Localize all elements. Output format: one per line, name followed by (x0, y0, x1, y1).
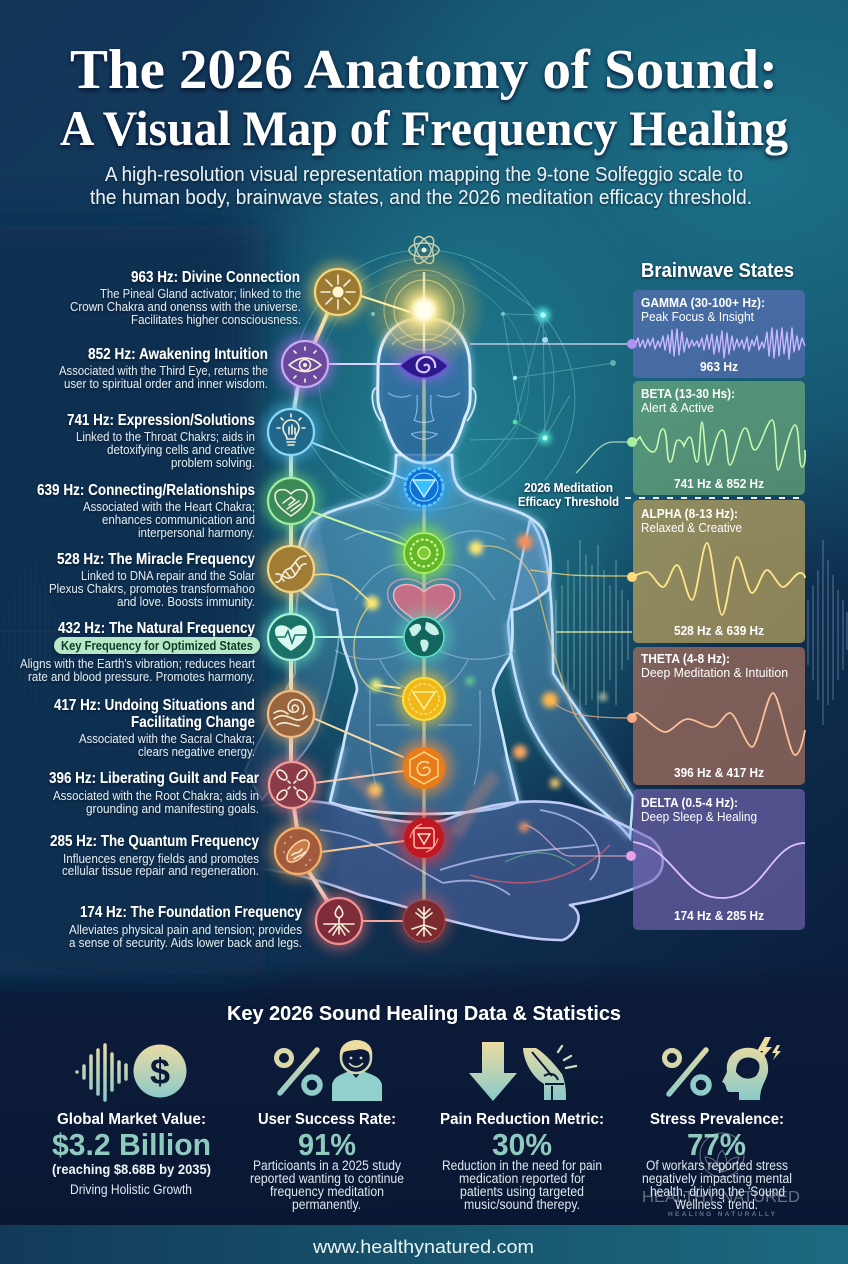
stat: user success rate (250, 1040, 404, 1212)
watermark: HEALING NATURALLY (668, 1211, 776, 1218)
text: 396 Hz: grounding and manifesting goals. (86, 802, 259, 816)
watermark (642, 1133, 800, 1218)
sound bars decoration (0, 540, 847, 725)
chakra: tree of life (397, 894, 451, 948)
text: 285 Hz (50, 833, 259, 878)
ears (372, 388, 476, 421)
network nodes (371, 308, 616, 444)
text: 639 Hz (37, 482, 255, 540)
dark shade behind left text (0, 225, 265, 975)
chakra: root (397, 811, 451, 865)
node: 396 Hz broken chains (263, 756, 321, 814)
chakra: sacral (396, 740, 452, 796)
panel: beta (627, 381, 805, 495)
connector: gamma (470, 343, 632, 345)
panel: alpha (627, 500, 805, 643)
text: 528 Hz (49, 551, 255, 609)
heading: key statistics: Key 2026 Sound Healing Data & Statistics (227, 1002, 621, 1025)
pelvic glow (352, 775, 496, 835)
chakra: heart green (396, 525, 452, 581)
subtitle (90, 164, 752, 209)
footer bar (0, 1225, 848, 1264)
heading: brainwave states: Brainwave States (641, 260, 794, 282)
central energy column (422, 350, 426, 920)
icon: down arrow and knee (469, 1042, 576, 1101)
text: 417 Hz (54, 697, 255, 759)
pill: key frequency: Key Frequency for Optimized States (61, 638, 253, 653)
panel: beta: Alert & Active (641, 401, 714, 415)
head glow top (392, 334, 456, 345)
text: 432 Hz: Aligns with the Earth's vibration; reduces heart (20, 657, 255, 671)
stat: user success rate: Particioants in a 2025 study (253, 1158, 401, 1173)
stat: global market value: Global Market Value: (57, 1111, 206, 1128)
crown glow (362, 248, 486, 372)
stat: global market value: $3.2 Billion (52, 1127, 211, 1162)
stat: global market value: Driving Holistic Growth (70, 1182, 192, 1197)
panel: delta: 174 Hz & 285 Hz (674, 909, 764, 923)
stat: pain reduction metric: Reduction in the need for pain (442, 1158, 602, 1173)
text: 852 Hz (59, 346, 268, 391)
text: 741 Hz: 741 Hz: Expression/Solutions (67, 412, 255, 429)
text: 396 Hz (49, 770, 259, 816)
stat: pain reduction metric: Pain Reduction Metric: (440, 1111, 604, 1128)
chest and abdomen contours (335, 531, 515, 785)
stat: stress prevalence: Wellness' trend. (675, 1197, 758, 1212)
panel: alpha: 528 Hz & 639 Hz (674, 624, 764, 638)
text: 528 Hz: 528 Hz: The Miracle Frequency (57, 551, 255, 568)
panel: gamma: Peak Focus & Insight (641, 310, 754, 324)
panel: theta: THETA (4-8 Hz): (641, 652, 730, 666)
stat: pain reduction metric: patients using targeted (460, 1184, 584, 1199)
left arm (245, 520, 340, 800)
stat: pain reduction metric (440, 1042, 604, 1212)
panel: beta: BETA (13-30 Hs): (641, 387, 735, 401)
text: 528 Hz: Linked to DNA repair and the Solar (81, 569, 255, 583)
stat: stress prevalence: Stress Prevalence: (650, 1111, 784, 1128)
right arm (508, 520, 633, 838)
text: 852 Hz: Associated with the Third Eye, returns the (59, 364, 268, 378)
watermark: HEALTHY NATURED (642, 1189, 800, 1206)
chakra: throat (397, 460, 451, 514)
label: meditation efficacy threshold (518, 481, 619, 509)
text: 852 Hz: 852 Hz: Awakening Intuition (88, 346, 268, 363)
panel: gamma: GAMMA (30-100+ Hz): (641, 296, 765, 310)
text: 432 Hz (20, 620, 260, 684)
body rim glow (299, 318, 633, 838)
title: The 2026 Anatomy of Sound: (70, 39, 778, 101)
node: 741 Hz light bulb (262, 403, 320, 461)
text: 432 Hz: rate and blood pressure. Promotes harmony. (28, 670, 255, 684)
icon: sound wave and dollar (77, 1044, 186, 1100)
text: 174 Hz: Alleviates physical pain and tension; provides (69, 923, 302, 937)
stat: global market value (52, 1044, 211, 1197)
stat: stress prevalence: negatively impacting mental (642, 1171, 792, 1186)
icon: percent and person (276, 1040, 382, 1101)
stat: user success rate: frequency meditation (270, 1184, 384, 1199)
text: 396 Hz: Associated with the Root Chakra; aids in (53, 789, 259, 803)
panel: delta: Deep Sleep & Healing (641, 810, 757, 824)
icon: sound wave and dollar: $ (150, 1051, 170, 1092)
node: 285 Hz cell (269, 822, 327, 880)
node: 417 Hz water swirl (262, 685, 320, 743)
stat: stress prevalence: Of workars reported stress (646, 1158, 788, 1173)
text: 174 Hz (69, 904, 302, 950)
text: 963 Hz: Facilitates higher consciousness. (131, 313, 301, 327)
text: 285 Hz: cellular tissue repair and regeneration. (62, 864, 259, 878)
chakra: third eye (398, 352, 450, 380)
text: 417 Hz: clears negative energy. (138, 745, 255, 759)
text: 639 Hz: 639 Hz: Connecting/Relationships (37, 482, 255, 499)
chakra: earth globe (397, 610, 451, 664)
panel: beta: 741 Hz & 852 Hz (674, 477, 764, 491)
network lines behind head (294, 250, 613, 510)
icon: percent and stressed head (664, 1037, 781, 1100)
text: 174 Hz: a sense of security. Aids lower back and legs. (69, 936, 302, 950)
text: 741 Hz (67, 412, 255, 470)
panel: delta: DELTA (0.5-4 Hz): (641, 796, 738, 810)
panel: theta (627, 647, 805, 785)
text: 174 Hz: 174 Hz: The Foundation Frequency (80, 904, 302, 921)
chakra: solar plexus (396, 671, 452, 727)
frequency chain connectors (291, 292, 410, 921)
node: 963 Hz sun (309, 263, 367, 321)
node: 852 Hz eye (276, 335, 334, 393)
panel: alpha: Relaxed & Creative (641, 521, 742, 535)
text: 741 Hz: Linked to the Throat Chakrs; aids in (76, 430, 255, 444)
stat: stress prevalence: 77% (687, 1127, 746, 1162)
text: 417 Hz: Associated with the Sacral Chakra; (79, 732, 255, 746)
glowing joints (365, 596, 379, 610)
panel: delta (626, 789, 805, 930)
stat: pain reduction metric: 30% (492, 1127, 552, 1162)
panel: gamma: 963 Hz (700, 360, 738, 374)
head and neck (378, 318, 470, 463)
text: 963 Hz: Crown Chakra and onenss with the universe. (70, 300, 301, 314)
text: 963 Hz: 963 Hz: Divine Connection (131, 269, 300, 286)
stat: stress prevalence (642, 1037, 792, 1212)
subtitle: A high-resolution visual representation mapping the 9-tone Solfeggio scale to (105, 164, 743, 186)
subtitle: the human body, brainwave states, and the 2026 meditation efficacy threshold. (90, 187, 752, 209)
footer bar: www.healthynatured.com (312, 1237, 534, 1257)
stat: user success rate: 91% (298, 1127, 356, 1162)
text: 432 Hz: 432 Hz: The Natural Frequency (58, 620, 255, 637)
torso (297, 455, 551, 814)
text: 396 Hz: 396 Hz: Liberating Guilt and Fear (49, 770, 259, 787)
text: 528 Hz: Plexus Chakrs, promotes transformahoo (49, 582, 255, 596)
text: 285 Hz: Influences energy fields and promotes (63, 852, 259, 866)
title: A Visual Map of Frequency Healing (60, 100, 788, 156)
stat: global market value: (reaching $8.68B by 2035) (52, 1161, 211, 1177)
leg contours (320, 810, 599, 895)
node: 639 Hz heart handshake (262, 472, 320, 530)
panel: gamma (627, 290, 805, 378)
stat: pain reduction metric: medication reported for (459, 1171, 585, 1186)
text: 417 Hz: Facilitating Change (131, 714, 255, 731)
node: 174 Hz sprout (310, 892, 368, 950)
label: meditation efficacy threshold: Efficacy Threshold (518, 495, 619, 509)
icon: atom symbol above head (409, 234, 439, 266)
text: 639 Hz: Associated with the Heart Chakra; (83, 500, 255, 514)
stat: user success rate: User Success Rate: (258, 1111, 396, 1128)
panel: theta: 396 Hz & 417 Hz (674, 766, 764, 780)
stat: user success rate: permanently. (292, 1197, 361, 1212)
text: 963 Hz: The Pineal Gland activator; linked to the (100, 287, 301, 301)
text: 852 Hz: user to spiritual order and inner wisdom. (64, 377, 268, 391)
text: 639 Hz: enhances communication and (102, 513, 255, 527)
heart symbol (388, 579, 460, 632)
stat: pain reduction metric: music/sound therepy. (464, 1197, 580, 1212)
connector: beta (576, 442, 632, 473)
legs (255, 801, 663, 940)
text: 417 Hz: 417 Hz: Undoing Situations and (54, 697, 255, 714)
text: 741 Hz: detoxifying cells and creative (107, 443, 255, 457)
face features (388, 393, 460, 439)
panel: theta: Deep Meditation & Intuition (641, 666, 788, 680)
label: meditation efficacy threshold: 2026 Meditation (524, 481, 613, 495)
human body figure (245, 318, 663, 940)
text: 963 Hz (70, 269, 301, 327)
energy nerves (474, 546, 625, 790)
stat: stress prevalence: health, driving the 'Sound (650, 1184, 785, 1199)
text: 285 Hz: 285 Hz: The Quantum Frequency (50, 833, 259, 850)
node: 432 Hz pulse heart (262, 608, 320, 666)
text: 639 Hz: interpersonal harmony. (138, 526, 255, 540)
text: 528 Hz: and love. Boosts immunity. (117, 595, 255, 609)
threshold dashed line (625, 497, 805, 499)
title (60, 39, 788, 156)
panel: alpha: ALPHA (8-13 Hz): (641, 507, 738, 521)
stat: user success rate: reported wanting to continue (250, 1171, 404, 1186)
node: 528 Hz DNA (262, 540, 320, 598)
text: 741 Hz: problem solving. (171, 456, 255, 470)
